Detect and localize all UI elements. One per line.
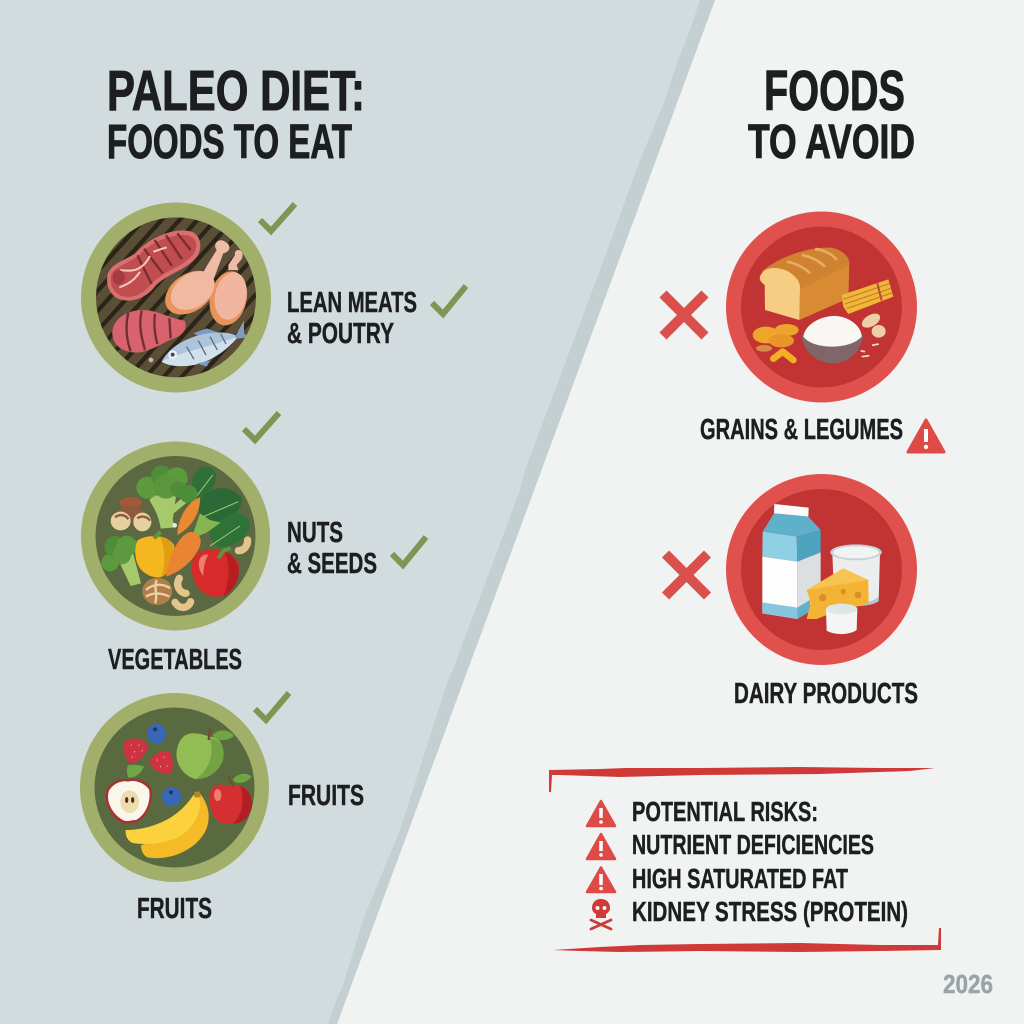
icon: pasta bundle — [842, 279, 893, 314]
icon: cashews — [175, 540, 248, 607]
icon: top broccoli — [136, 465, 197, 529]
label: year: 2026 — [943, 969, 993, 999]
icon: nuts cluster — [111, 497, 151, 531]
icon: walnut — [142, 578, 172, 605]
title: foods to avoid: TO AVOID — [748, 116, 915, 169]
list item: kidney stress — [591, 896, 908, 929]
icon: milk glass — [830, 544, 882, 606]
label: lean meats and poutry — [287, 287, 417, 350]
title: foods to eat: PALEO DIET: — [107, 59, 365, 123]
icon: yellow pepper — [135, 532, 175, 577]
icon: large carrot — [166, 532, 201, 577]
icon: check nuts and seeds — [392, 537, 426, 565]
icon: small carrot — [177, 497, 200, 535]
label: fruits beside plate: FRUITS — [288, 780, 364, 812]
icon: bananas — [126, 792, 209, 858]
list item: high saturated fat — [587, 863, 848, 894]
icon: fish — [162, 321, 249, 367]
label: lean meats and poutry: & POUTRY — [287, 318, 394, 350]
label: lean meats and poutry: LEAN MEATS — [287, 287, 417, 319]
label: nuts and seeds: & SEEDS — [287, 548, 377, 580]
icon: x mark dairy — [666, 554, 708, 596]
label: nuts and seeds: NUTS — [287, 517, 343, 549]
icon: chips and legumes — [753, 311, 886, 360]
icon: small cup — [826, 604, 857, 634]
label: fruits below plate: FRUITS — [137, 893, 212, 925]
icon: apple half — [106, 765, 152, 824]
icon: meats plate — [81, 202, 271, 392]
label: grains and legumes: GRAINS & LEGUMES — [700, 414, 903, 446]
icon: dairy plate — [726, 474, 917, 665]
icon: x mark grains — [663, 294, 705, 336]
label: vegetables: VEGETABLES — [108, 644, 242, 676]
list item: potential risks: POTENTIAL RISKS: — [632, 796, 818, 827]
title: foods to avoid — [748, 59, 915, 169]
icon: chicken drumsticks — [165, 240, 248, 326]
icon: leafy greens — [192, 466, 250, 547]
list item: nutrient deficiencies: NUTRIENT DEFICIENCIES — [632, 829, 874, 860]
icon: red apple — [209, 774, 252, 823]
panel: potential risks — [549, 767, 941, 952]
list item: high saturated fat: HIGH SATURATED FAT — [632, 863, 848, 894]
icon: grains plate — [726, 212, 917, 402]
icon: milk carton — [762, 504, 821, 619]
icon: left broccoli — [101, 536, 141, 586]
icon: rice bowl — [801, 316, 863, 363]
title: foods to avoid: FOODS — [764, 59, 905, 123]
icon: green apple — [176, 728, 234, 779]
icon: steak — [107, 230, 200, 301]
title: foods to eat — [107, 59, 365, 169]
icon: check lean meats — [432, 286, 466, 314]
icon: fruits plate — [80, 693, 269, 882]
title: foods to eat: FOODS TO EAT — [107, 116, 352, 169]
icon: blueberries — [147, 724, 181, 806]
icon: check meats plate — [260, 204, 295, 231]
frame: red brush border — [549, 767, 941, 952]
icon: check fruits plate — [255, 693, 289, 720]
icon: check vegetables plate — [244, 413, 279, 440]
list item: potential risks — [587, 796, 818, 827]
icon: cheese wedge — [807, 568, 869, 619]
icon: red pepper — [192, 548, 239, 597]
list item: kidney stress: KIDNEY STRESS (PROTEIN) — [632, 896, 908, 927]
icon: vegetables plate — [81, 442, 270, 630]
icon: warning grains — [908, 420, 944, 452]
icon: tuna steak — [112, 310, 186, 353]
icon: bread loaf — [760, 248, 849, 320]
label: dairy products: DAIRY PRODUCTS — [734, 678, 918, 710]
label: nuts and seeds — [287, 517, 377, 580]
list item: nutrient deficiencies — [587, 829, 874, 860]
icon: strawberries — [123, 738, 173, 774]
